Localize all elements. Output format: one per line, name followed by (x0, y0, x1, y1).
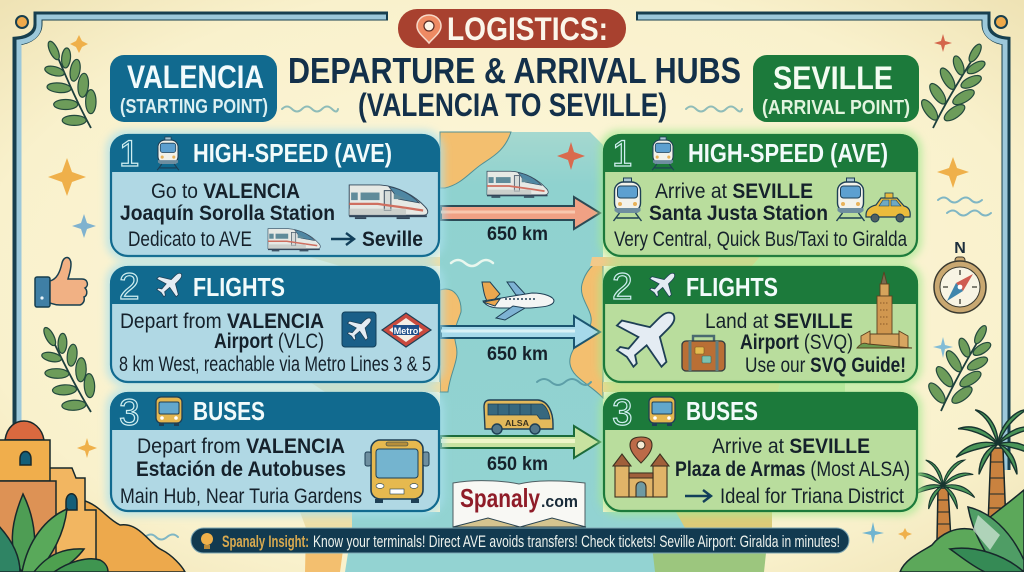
ornamental frame (16, 16, 1007, 470)
icon: large train (349, 185, 428, 219)
panel: Seville high-speed (599, 130, 922, 261)
arrow: flight route (441, 282, 600, 365)
panel: Seville high-speed: 1 (612, 133, 633, 174)
badge: Valencia starting point: VALENCIA (127, 59, 264, 95)
icon: plane small (650, 273, 675, 297)
panel: Valencia high-speed: 1 (119, 133, 140, 174)
text: depart from Valencia airport (119, 310, 431, 376)
title pill: logistics: LOGISTICS: (447, 11, 608, 47)
badge: Valencia starting point (110, 55, 277, 122)
text: go to Valencia: Dedicato to AVE (128, 228, 252, 251)
panel: Valencia buses: 3 (119, 392, 140, 433)
arrow: bus route: 650 km (487, 454, 548, 475)
decorative waves (145, 106, 991, 540)
icon: bus front small (649, 397, 675, 426)
panel: Seville buses: BUSES (686, 396, 758, 426)
text: arrive at Seville Santa Justa (614, 180, 907, 251)
icon: train front (652, 137, 674, 170)
right palms and foliage (900, 410, 1024, 572)
leaf branch top left (27, 32, 110, 139)
panel: Valencia buses (106, 388, 444, 516)
icon: metro sign: Metro (394, 326, 419, 336)
logo: Spanaly.com book: .com (541, 492, 578, 511)
icon: train on route (487, 171, 548, 198)
icon: plane on route (482, 282, 554, 320)
icon: ALSA coach: ALSA (505, 419, 529, 428)
text: arrive at Seville Santa Justa: Very Central, Quick Bus/Taxi to Giralda (614, 228, 907, 251)
panel: Valencia flights: 2 (119, 266, 140, 307)
text: depart from Valencia airport: 8 km West, reachable via Metro Lines 3 & 5 (119, 353, 431, 376)
text: land at Seville airport: Use our SVQ Guide! (745, 354, 906, 377)
icon: train left (614, 178, 642, 221)
icon: compass (934, 240, 986, 313)
left castle and foliage (0, 421, 185, 572)
insight bar: Spanaly Insight: (222, 532, 309, 551)
text: depart from Valencia airport: Airport (VLC) (214, 330, 324, 353)
badge: Seville arrival point (753, 55, 919, 122)
leaf branch mid right (918, 314, 1005, 421)
text: go to Valencia: Joaquín Sorolla Station (120, 202, 335, 225)
text: land at Seville airport (705, 310, 906, 377)
panel: Seville flights: FLIGHTS (686, 272, 778, 302)
heading: departure and arrival hubs (288, 50, 741, 123)
arrow: bus route (441, 400, 600, 475)
panel: Seville flights (599, 262, 922, 387)
text: depart from Valencia airport: Depart from VALENCIA (120, 310, 324, 333)
text: depart from Valencia bus station: Main Hub, Near Turia Gardens (120, 485, 362, 508)
panel: Seville buses: 3 (612, 392, 633, 433)
arrow: train route: 650 km (487, 224, 548, 245)
panel: Seville flights: 2 (612, 266, 633, 307)
icon: bus front large (365, 440, 429, 503)
text: land at Seville airport: Land at SEVILLE (705, 310, 853, 333)
logo: Spanaly.com book: Spanaly (460, 483, 540, 513)
icon: ALSA coach (484, 400, 553, 434)
badge: Seville arrival point: SEVILLE (773, 60, 893, 96)
icon: large plane (617, 313, 674, 367)
panel: Valencia high-speed (106, 130, 444, 261)
icon: light bulb (201, 533, 213, 549)
panel: Valencia buses: BUSES (193, 396, 265, 426)
icon: arrow to Seville (331, 233, 354, 245)
badge: Valencia starting point: (STARTING POINT) (120, 96, 268, 118)
icon: train right (836, 178, 864, 221)
text: arrive at Seville Santa Justa: Santa Justa Station (649, 202, 828, 225)
text: arrive at Plaza de Armas (675, 435, 910, 508)
insight bar (191, 528, 849, 553)
icon: arrow to Triana (685, 490, 711, 502)
text: depart from Valencia bus station: Depart from VALENCIA (137, 435, 345, 458)
leaf branch top right (910, 32, 1000, 139)
arrow: train route (441, 171, 600, 245)
text: arrive at Plaza de Armas: Ideal for Triana District (720, 485, 904, 508)
map: Spain between the panels (300, 132, 845, 572)
icon: airport sign (342, 312, 376, 347)
text: depart from Valencia bus station (120, 435, 362, 508)
text: go to Valencia (120, 180, 423, 251)
badge: Seville arrival point: (ARRIVAL POINT) (762, 97, 910, 119)
panel: Valencia flights: FLIGHTS (193, 272, 285, 302)
text: arrive at Plaza de Armas: Plaza de Armas (Most ALSA) (675, 458, 910, 481)
icon: Plaza de Armas building (613, 437, 669, 497)
heading: departure and arrival hubs: (VALENCIA TO SEVILLE) (358, 87, 667, 123)
text: go to Valencia: Seville (362, 228, 423, 251)
icon: thumbs up (35, 257, 87, 307)
icon: Giralda tower (857, 272, 912, 348)
panel: Valencia flights (106, 262, 444, 387)
text: arrive at Seville Santa Justa: Arrive at SEVILLE (655, 180, 813, 203)
text: go to Valencia: Go to VALENCIA (151, 180, 300, 203)
text: arrive at Plaza de Armas: Arrive at SEVILLE (712, 435, 870, 458)
icon: location pin (417, 15, 441, 43)
icon: plane (157, 273, 182, 297)
panel: Valencia high-speed: HIGH-SPEED (AVE) (193, 138, 392, 168)
icon: bus front small (156, 397, 182, 426)
arrow: flight route: 650 km (487, 344, 548, 365)
panel: Seville high-speed: HIGH-SPEED (AVE) (688, 138, 888, 168)
icon: compass: N (954, 240, 966, 257)
heading: departure and arrival hubs: DEPARTURE & ARRIVAL HUBS (288, 50, 741, 91)
text: depart from Valencia bus station: Estación de Autobuses (136, 458, 346, 481)
icon: train front (157, 137, 179, 170)
leaf branch mid left (23, 317, 110, 424)
panel: Seville buses (599, 388, 922, 516)
icon: suitcase (682, 336, 725, 371)
logo: Spanaly.com book (453, 481, 586, 527)
icon: metro sign (382, 313, 431, 347)
icon: taxi (866, 193, 910, 222)
text: land at Seville airport: Airport (SVQ) (740, 331, 853, 354)
icon: small train (268, 229, 320, 251)
